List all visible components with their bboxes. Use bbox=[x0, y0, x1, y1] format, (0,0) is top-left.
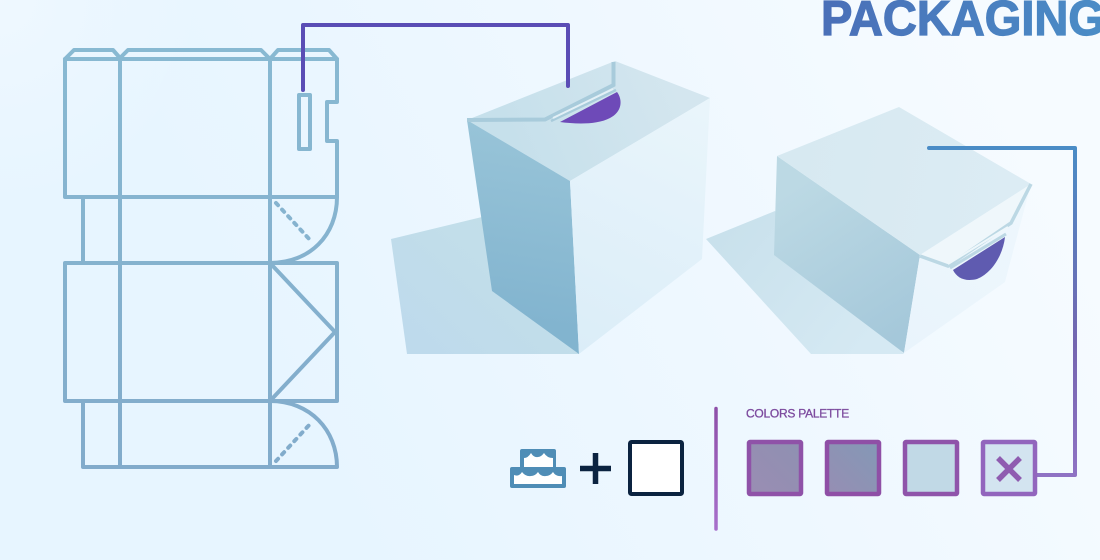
box front bbox=[570, 98, 710, 354]
lower dashed fold bbox=[276, 423, 311, 461]
left box bbox=[467, 61, 710, 354]
flap edge bbox=[467, 62, 614, 120]
lock slot bbox=[299, 95, 310, 149]
lower tuck strip bbox=[83, 401, 337, 467]
box dieline bbox=[65, 50, 337, 467]
middle panel row bbox=[65, 263, 337, 401]
connector: dieline to left box bbox=[303, 25, 568, 90]
white square bbox=[630, 442, 682, 494]
open flap semicircle bbox=[953, 237, 1005, 280]
flap edge bbox=[920, 184, 1031, 266]
palette heading: COLORS PALETTE bbox=[746, 406, 849, 420]
icon: cake layers bbox=[510, 449, 566, 488]
triangular gusset bbox=[270, 263, 335, 401]
flap slit bbox=[551, 90, 616, 121]
palette divider bbox=[714, 408, 718, 529]
swatch 3 bbox=[905, 442, 957, 494]
right box shadow bbox=[706, 211, 904, 354]
swatch 4 with cross bbox=[983, 442, 1035, 494]
swatch 1 bbox=[749, 442, 801, 494]
left box shadow bbox=[391, 217, 579, 354]
vertical fold lines bbox=[120, 58, 270, 467]
upper panel row bbox=[65, 59, 337, 197]
right box bbox=[774, 107, 1031, 353]
box front bbox=[904, 184, 1031, 353]
box top bbox=[467, 61, 710, 181]
flap face bbox=[920, 184, 1031, 264]
open flap semicircle bbox=[560, 92, 621, 123]
connector: right box to palette bbox=[929, 148, 1075, 475]
top flaps bbox=[65, 50, 337, 59]
box top bbox=[777, 107, 1031, 255]
upper tuck strip bbox=[83, 197, 337, 263]
upper dashed fold bbox=[276, 203, 311, 241]
plus sign bbox=[580, 453, 611, 484]
box side bbox=[467, 120, 579, 354]
swatch 2 bbox=[827, 442, 879, 494]
flap slit bbox=[950, 234, 1006, 268]
box side bbox=[774, 156, 920, 353]
flap slit highlight bbox=[553, 89, 613, 118]
